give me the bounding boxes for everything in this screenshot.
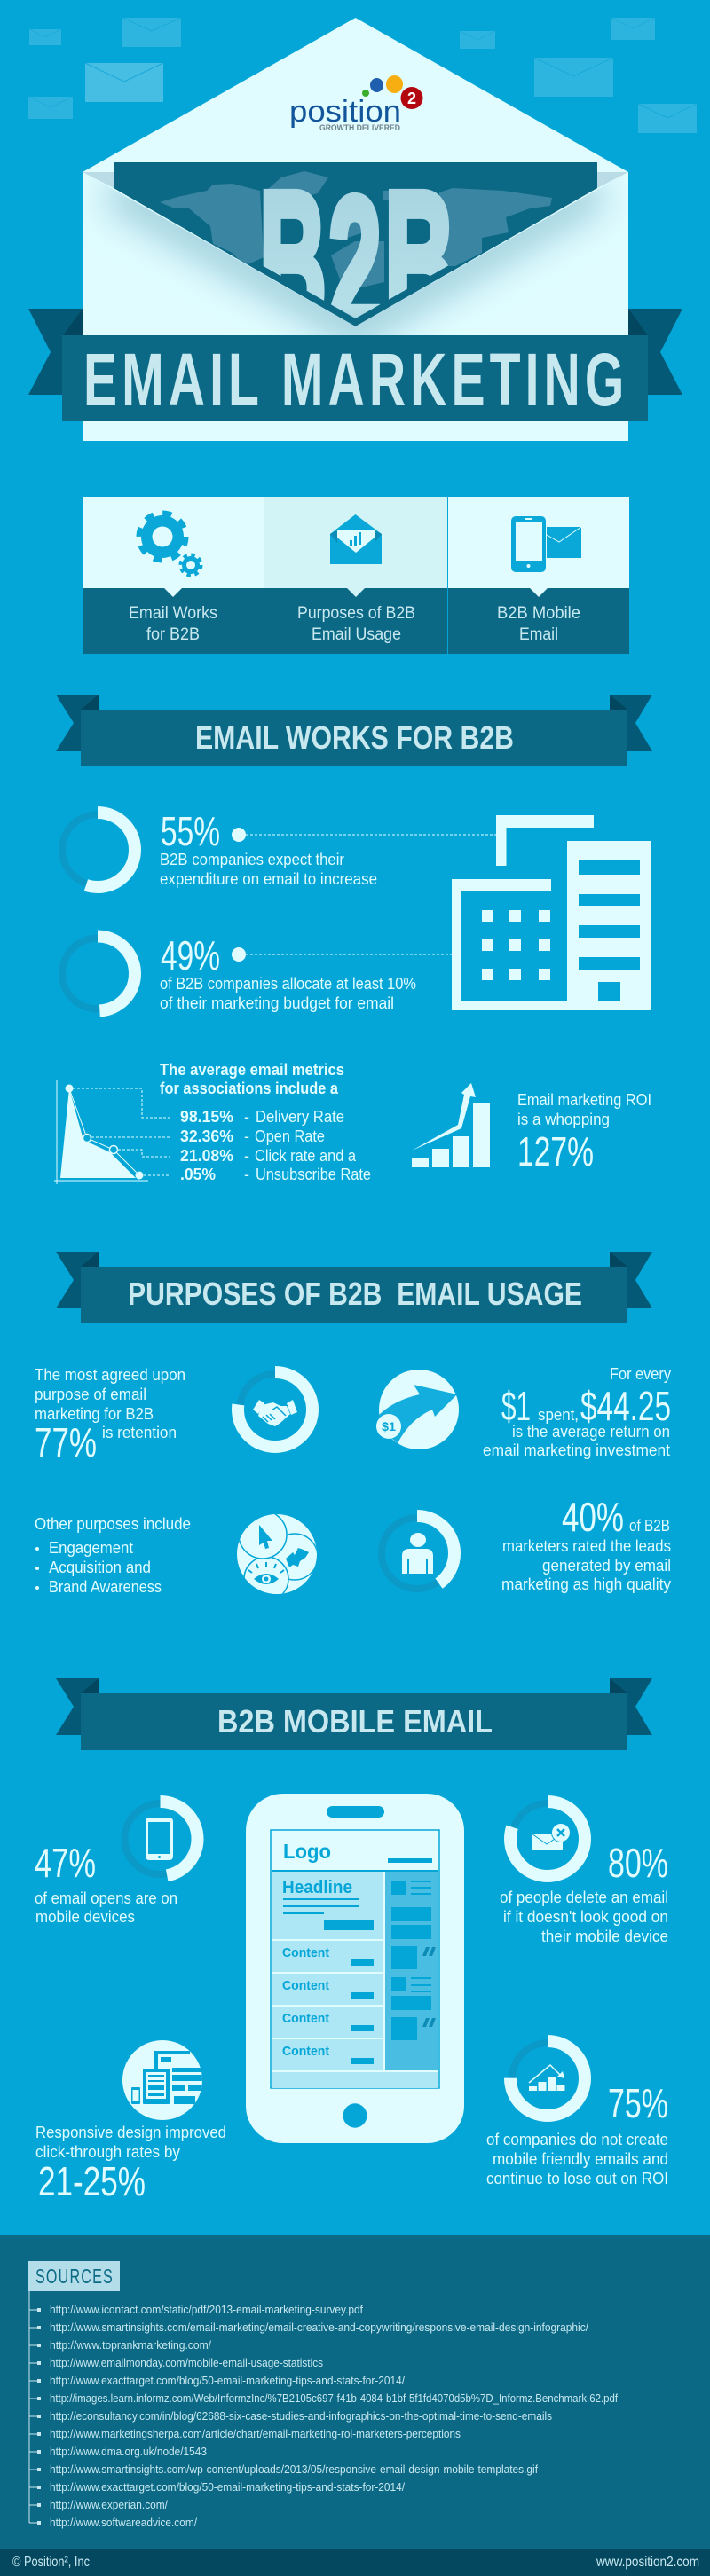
text: 21-25%: [36, 2124, 226, 2204]
text: 21-25%: Responsive design improved: [36, 2124, 226, 2141]
ROI text: [517, 1091, 651, 1174]
nav labels: [129, 604, 580, 644]
text: other purposes list: Brand Awareness: [49, 1578, 162, 1596]
text: 80%: their mobile device: [541, 1928, 668, 1945]
section banner: purposes of B2B email usage: [56, 1252, 652, 1323]
sources list: http://www.exacttarget.com/blog/50-email-marketing-tips-and-stats-for-2014/: [50, 2375, 405, 2387]
text: 75%: mobile friendly emails and: [493, 2150, 668, 2168]
nav labels: Email Works: [129, 604, 217, 623]
text: $1 spent $44.25: spent,: [538, 1406, 579, 1424]
text: 77% retention: [35, 1366, 185, 1465]
icon: cursor, puzzle and eye circles: [237, 1514, 317, 1594]
section banner: email works for B2B: [56, 695, 652, 766]
text: 75%: 75%: [608, 2080, 668, 2126]
text: 80%: 80%: [608, 1840, 668, 1886]
text: 40% high quality leads: 40%: [562, 1494, 624, 1540]
navigation panel: [83, 497, 629, 654]
position2 logo: position: [289, 95, 401, 129]
text: other purposes list: Other purposes include: [35, 1515, 191, 1533]
title: EMAIL MARKETING: [83, 339, 624, 422]
dark panel with world map: [114, 162, 597, 326]
icon: envelope with x: [532, 1824, 570, 1850]
sources list: http://www.dma.org.uk/node/1543: [50, 2446, 207, 2458]
sources list: http://www.icontact.com/static/pdf/2013-email-marketing-survey.pdf: [50, 2304, 363, 2316]
text: 47%: mobile devices: [36, 1908, 135, 1926]
sources list: [50, 2304, 618, 2529]
icon: envelope with chart: [330, 514, 382, 564]
email metrics text: Open Rate: [255, 1127, 325, 1145]
email metrics text: .05%: [180, 1166, 216, 1183]
background floating envelopes: [28, 18, 697, 133]
text: 21-25%: 21-25%: [38, 2158, 146, 2204]
text: 77% retention: marketing for B2B: [35, 1405, 154, 1423]
icon: falling chart: [529, 2065, 564, 2091]
phone screen: [271, 1830, 439, 2088]
text: 47%: [35, 1840, 178, 1926]
icon: phone and email: [511, 516, 581, 572]
email metrics text: -: [244, 1147, 249, 1165]
sources heading: [28, 2261, 120, 2291]
text: 75%: [486, 2080, 668, 2187]
email metrics text: Unsubscribe Rate: [256, 1166, 371, 1183]
text: 75%: of companies do not create: [486, 2131, 668, 2148]
phone screen: Content: [282, 1978, 329, 1993]
line chart: email metrics: [54, 1080, 170, 1184]
sources list: http://www.toprankmarketing.com/: [50, 2339, 211, 2352]
email metrics text: -: [244, 1127, 249, 1145]
sources list: http://www.smartinsights.com/email-marketing/email-creative-and-copywriting/responsive-email-design-infographic/: [50, 2321, 588, 2334]
text: 80%: if it doesn't look good on: [503, 1908, 668, 1926]
sources list: http://www.exacttarget.com/blog/50-email-marketing-tips-and-stats-for-2014/: [50, 2481, 405, 2494]
envelope pocket: [94, 181, 617, 335]
donut chart 40% with person: [380, 1516, 454, 1590]
icon: ROI rising bars: [412, 1083, 490, 1167]
phone screen: Content: [282, 1945, 329, 1960]
text: $1 spent $44.25: $1: [501, 1383, 531, 1429]
stat 49%: of B2B companies allocate at least 10%: [160, 975, 416, 993]
icon: responsive devices: [122, 2040, 202, 2120]
text: other purposes list: Engagement: [49, 1539, 133, 1557]
big B2B lettering: [263, 188, 449, 318]
sources list: http://www.experian.com/: [50, 2499, 168, 2511]
email metrics text: -: [244, 1166, 249, 1183]
sources tree lines: [28, 2291, 41, 2525]
phone screen: Content: [282, 2011, 329, 2026]
email metrics text: 98.15%: [180, 1108, 233, 1126]
phone illustration: [246, 1794, 464, 2143]
text: 40% high quality leads: marketers rated the leads: [502, 1537, 671, 1555]
icon: dollar return arrow: [376, 1370, 459, 1449]
big B2B lettering: 2: [328, 157, 382, 371]
section banner: email works for B2B: EMAIL WORKS FOR B2B: [195, 719, 514, 756]
donut chart 75% with chart icon: [510, 2041, 585, 2116]
sources heading: SOURCES: [36, 2266, 113, 2289]
text: 77% retention: The most agreed upon: [35, 1366, 185, 1384]
icon: dollar return arrow: $1: [382, 1419, 396, 1433]
text: 75%: continue to lose out on ROI: [486, 2170, 668, 2187]
text: 21-25%: click-through rates by: [36, 2143, 180, 2161]
email metrics text: The average email metrics: [160, 1061, 344, 1079]
text: other purposes list: [35, 1515, 191, 1596]
text: 77% retention: is retention: [102, 1424, 177, 1441]
ROI text: is a whopping: [517, 1111, 610, 1128]
text: 40% high quality leads: generated by email: [542, 1557, 671, 1575]
email metrics text: 32.36%: [180, 1127, 233, 1145]
email metrics text: -: [244, 1108, 249, 1126]
icon: gears: [139, 514, 201, 575]
big B2B lettering: B: [259, 151, 327, 373]
email metrics text: Delivery Rate: [256, 1108, 344, 1126]
position2 logo: 2: [407, 90, 416, 107]
icon: person: [402, 1533, 433, 1574]
text: 77% retention: 77%: [35, 1419, 97, 1465]
email metrics text: Click rate and a: [255, 1147, 357, 1165]
stat 49%: [160, 932, 416, 1012]
text: 80%: [500, 1840, 668, 1945]
connector 55%: [232, 828, 496, 842]
hero envelope: B: [384, 151, 455, 373]
nav labels: for B2B: [146, 625, 200, 644]
icon: smartphone: [146, 1818, 173, 1860]
footer: [0, 2549, 710, 2576]
hero envelope: [83, 18, 628, 441]
sources list: http://www.softwareadvice.com/: [50, 2517, 197, 2529]
donut chart 49%: [60, 937, 135, 1011]
section banner: B2B mobile email: [56, 1678, 652, 1750]
sources panel: [0, 2235, 710, 2549]
position2 logo: GROWTH DELIVERED: [320, 123, 400, 132]
sources list: http://images.learn.informz.com/Web/InformzInc/%7B2105c697-f41b-4084-b1bf-5f1fd4070d5b%7D_Informz.Benchmark.62.pdf: [50, 2392, 618, 2405]
text: 47%: of email opens are on: [35, 1889, 178, 1907]
donut chart 80% with email delete icon: [510, 1802, 585, 1876]
donut chart 55%: [60, 813, 135, 887]
email metrics text: [160, 1061, 371, 1183]
email metrics text: 21.08%: [180, 1147, 233, 1165]
stat 55%: 55%: [161, 808, 220, 854]
email metrics text: for associations include a: [160, 1080, 339, 1097]
section banner: purposes of B2B email usage: PURPOSES OF B2B EMAIL USAGE: [128, 1276, 582, 1312]
text: $1 spent $44.25: [483, 1365, 671, 1459]
section banner: B2B mobile email: B2B MOBILE EMAIL: [217, 1703, 493, 1740]
text: 40% high quality leads: [501, 1494, 671, 1593]
nav labels: Purposes of B2B: [297, 604, 415, 623]
text: $1 spent $44.25: is the average return on: [512, 1423, 670, 1441]
sources list: http://econsultancy.com/in/blog/62688-six-case-studies-and-infographics-on-the-optimal-time-to-send-emails: [50, 2410, 552, 2423]
sources list: http://www.marketingsherpa.com/article/chart/email-marketing-roi-marketers-perceptions: [50, 2428, 461, 2440]
stat 55%: B2B companies expect their: [160, 851, 344, 868]
text: $1 spent $44.25: $44.25: [580, 1383, 671, 1429]
text: 47%: 47%: [35, 1840, 96, 1886]
phone screen: Logo: [283, 1840, 331, 1863]
text: 77% retention: purpose of email: [35, 1386, 146, 1403]
nav labels: B2B Mobile: [497, 604, 580, 623]
stat 49%: of their marketing budget for email: [160, 994, 394, 1012]
connector 49%: [232, 947, 452, 962]
position2 logo: [289, 75, 422, 132]
text: $1 spent $44.25: email marketing investment: [483, 1441, 670, 1459]
sources list: http://www.emailmonday.com/mobile-email-usage-statistics: [50, 2357, 323, 2369]
nav labels: Email Usage: [312, 625, 401, 644]
text: 40% high quality leads: marketing as high quality: [501, 1575, 671, 1593]
text: $1 spent $44.25: For every: [610, 1365, 671, 1383]
nav labels: Email: [519, 625, 558, 644]
text: 40% high quality leads: of B2B: [629, 1517, 670, 1535]
donut chart 77%: [238, 1372, 312, 1447]
ROI text: Email marketing ROI: [517, 1091, 651, 1109]
icon: handshake: [253, 1400, 297, 1426]
donut chart 47% with phone icon: [122, 1802, 197, 1876]
text: 80%: of people delete an email: [500, 1889, 668, 1906]
ROI text: 127%: [517, 1128, 594, 1174]
phone screen: Headline: [282, 1878, 352, 1897]
main title ribbon: [28, 309, 682, 422]
sources list: http://www.smartinsights.com/wp-content/uploads/2013/05/responsive-email-design-mobile-templates.gif: [50, 2463, 538, 2476]
text: other purposes list: Acquisition and: [49, 1559, 151, 1576]
icon: office buildings: [452, 815, 651, 1010]
stat 55%: [160, 808, 377, 888]
stat 49%: 49%: [161, 932, 220, 978]
stat 55%: expenditure on email to increase: [160, 870, 377, 888]
phone screen: Content: [282, 2044, 329, 2059]
footer: © Position², Inc: [12, 2555, 90, 2570]
